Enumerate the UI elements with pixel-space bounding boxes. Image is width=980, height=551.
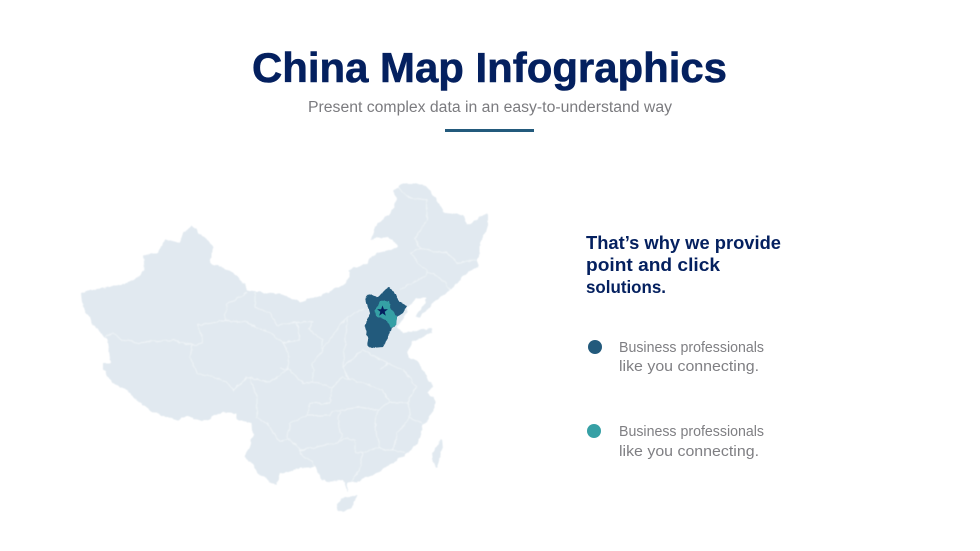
mainland xyxy=(81,184,488,492)
highlighted region: Hebei xyxy=(365,287,407,348)
heading: solutions xyxy=(586,232,781,297)
legend item 1 xyxy=(588,340,764,375)
heading: solutions: point and click xyxy=(586,254,721,275)
title underline xyxy=(445,129,534,132)
island: Taiwan xyxy=(431,440,443,468)
province borders xyxy=(105,187,477,482)
base map xyxy=(81,184,488,512)
icon: capital star xyxy=(377,306,388,316)
highlighted regions xyxy=(365,287,407,348)
legend dot: teal xyxy=(587,424,601,438)
legend text 1: like you connecting. xyxy=(619,358,759,375)
legend text 2 xyxy=(619,424,764,460)
legend text 1 xyxy=(619,340,764,375)
legend text 1: Business professionals xyxy=(619,340,764,356)
legend text 2: Business professionals xyxy=(619,424,764,440)
title: China Map Infographics xyxy=(252,44,727,91)
highlighted region: Beijing and Tianjin xyxy=(375,301,397,328)
subtitle: Present complex data in an easy-to-understand way xyxy=(308,99,672,116)
legend item 2 xyxy=(587,424,764,460)
heading: solutions: That’s why we provide xyxy=(586,232,781,253)
island: Hainan xyxy=(337,496,357,512)
heading: solutions: solutions. xyxy=(586,277,666,297)
legend dot: dark blue xyxy=(588,340,602,354)
legend text 2: like you connecting. xyxy=(619,443,759,460)
map of China xyxy=(81,184,488,512)
